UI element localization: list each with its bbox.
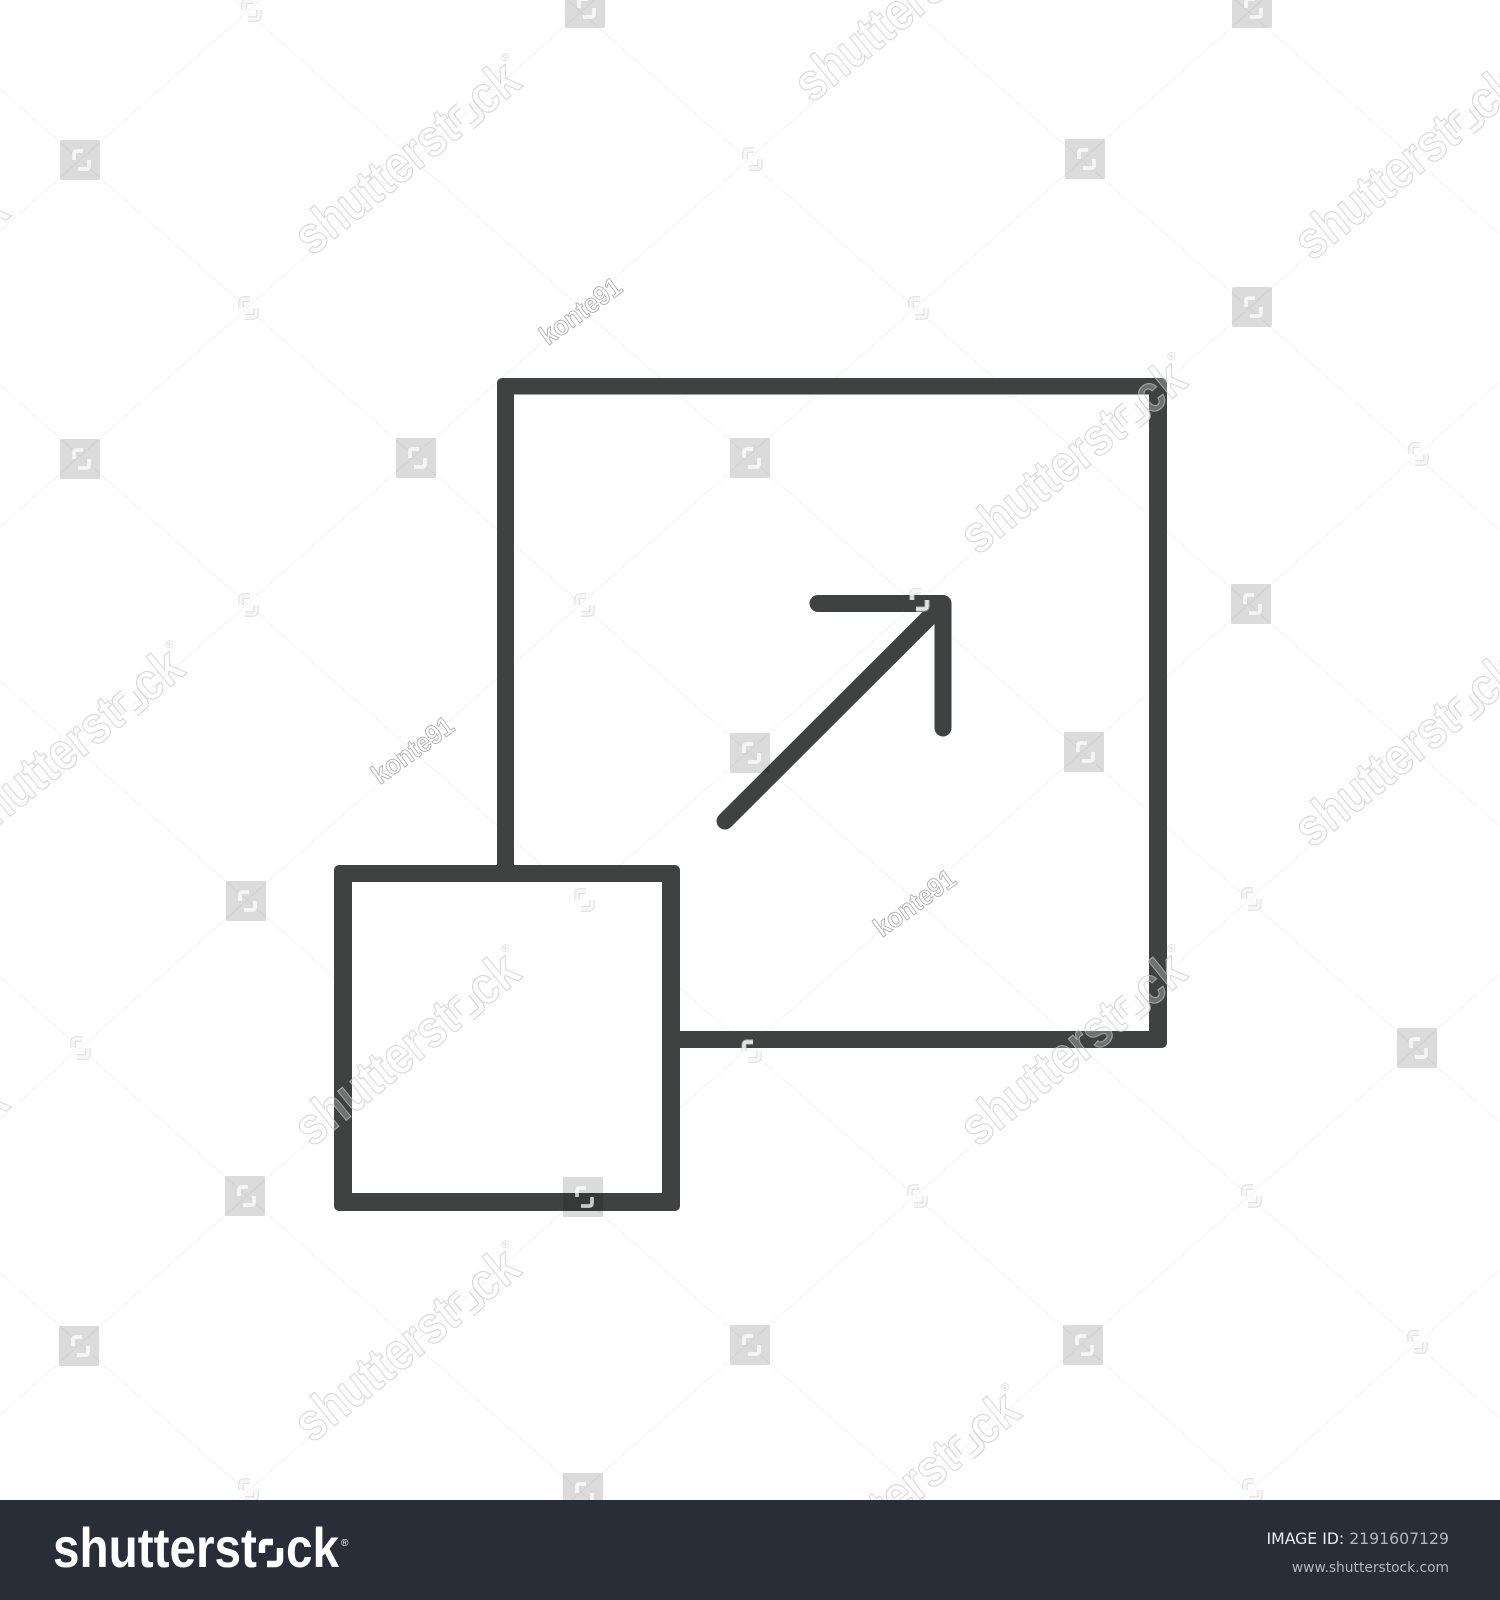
watermark: contributor name repeats: konte91	[868, 863, 962, 943]
footer logo: shutterstock wordmark: ®	[341, 1538, 349, 1549]
watermark: shutterstock text repeats: shutterstock	[282, 1236, 531, 1453]
footer logo: shutterstock wordmark: shutterstock	[53, 1516, 340, 1579]
watermark: shutterstock text repeats: shutterstock	[282, 49, 531, 266]
footer bar	[0, 1500, 1500, 1600]
watermark: contributor name repeats	[366, 271, 962, 943]
icon: resize squares with arrow	[334, 378, 1167, 1211]
watermark: shutterstock text repeats: shutterstock	[282, 940, 531, 1157]
large square outline	[497, 378, 1167, 1048]
watermark: shutterstock text repeats: shutterstock	[782, 1379, 1031, 1596]
footer website: www.shutterstock.com	[1292, 1560, 1449, 1576]
small square outline	[334, 865, 680, 1211]
footer image id: IMAGE ID: 2191607129	[1267, 1529, 1449, 1548]
watermark: contributor name repeats: konte91	[366, 710, 460, 790]
watermark: shutterstock text repeats: shutterstock	[948, 348, 1197, 565]
diagonal arrow	[725, 604, 943, 821]
watermark: contributor name repeats: konte91	[534, 271, 628, 351]
watermark: shutterstock text repeats: shutterstock	[948, 940, 1197, 1157]
